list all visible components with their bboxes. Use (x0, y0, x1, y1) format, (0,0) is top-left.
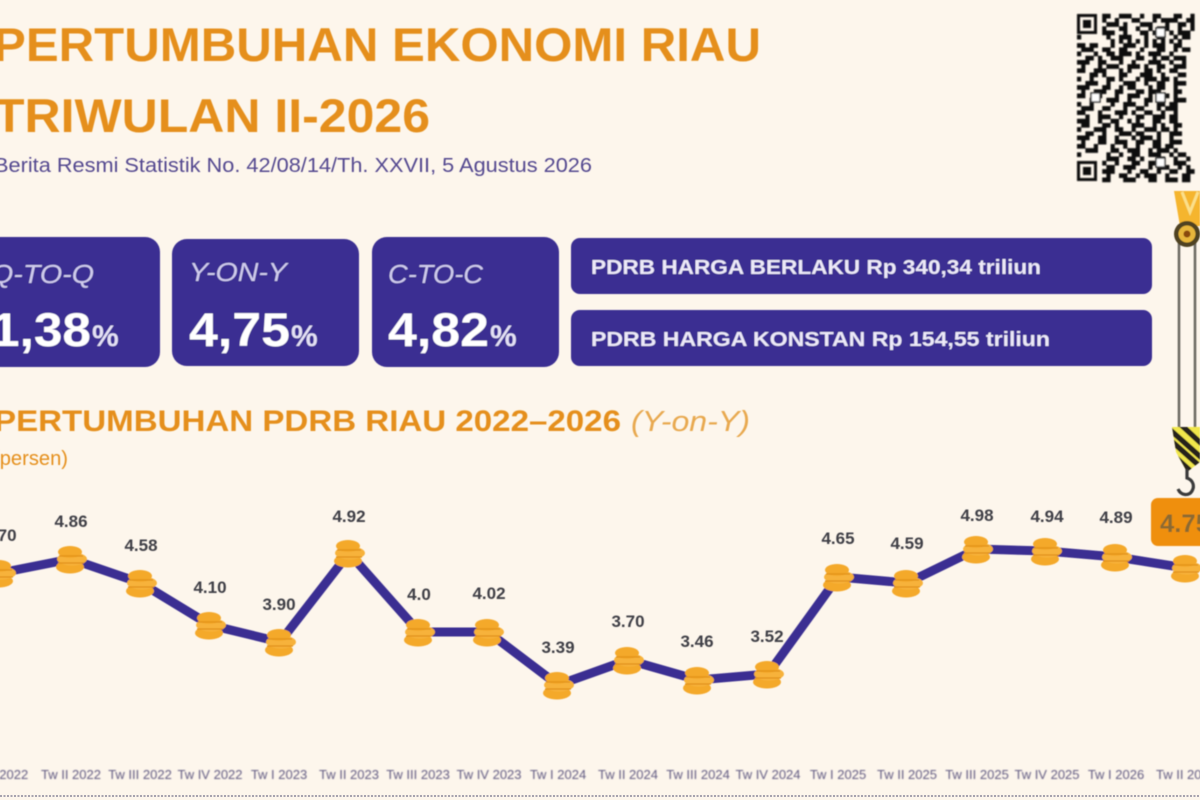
card: Y-on-Y: Y-ON-Y (189, 257, 289, 287)
bar: PDRB harga berlaku: PDRB HARGA BERLAKU Rp 340,34 triliun (591, 257, 1041, 279)
quarter axis labels: Tw I 2023 (251, 767, 307, 782)
data labels: 4.86 (54, 512, 88, 531)
data labels: 3.46 (680, 632, 714, 651)
card: C-to-C: C-TO-C (388, 259, 483, 289)
quarter axis labels: Tw IV 2023 (456, 767, 522, 782)
chart heading (0, 405, 750, 470)
data labels: 4.92 (332, 507, 366, 526)
quarter axis labels: Tw II 2023 (319, 767, 379, 782)
crane hook (1151, 191, 1200, 546)
data labels: 3.70 (611, 612, 645, 631)
data labels: 4.59 (890, 534, 924, 553)
crane top bracket (1174, 191, 1200, 226)
bar: PDRB harga konstan (571, 310, 1152, 366)
crane hook block (1171, 426, 1200, 472)
quarter axis labels: Tw IV 2022 (177, 767, 243, 782)
bar: PDRB harga berlaku (571, 238, 1152, 294)
card: C-to-C (372, 237, 559, 367)
QR finder patterns (1078, 16, 1096, 180)
QR alignment patterns (1091, 28, 1165, 167)
crane ropes (1179, 234, 1195, 427)
data labels: 3.39 (541, 638, 575, 657)
crane pulley (1174, 221, 1200, 247)
quarter axis labels: Tw II 2022 (41, 767, 101, 782)
quarter axis labels: Tw IV 2024 (735, 767, 801, 782)
chart heading: (Y-on-Y) (631, 406, 750, 438)
data labels: 4.58 (124, 536, 158, 555)
trend line (0, 549, 1186, 685)
title: PERTUMBUHAN EKONOMI RIAU (0, 18, 761, 71)
card: C-to-C: % (490, 320, 517, 353)
data labels: 4.02 (472, 584, 506, 603)
data labels: 4.10 (193, 578, 227, 597)
hook (1178, 469, 1193, 495)
quarter axis labels: Tw III 2025 (945, 767, 1009, 782)
card: C-to-C: 4,82 (388, 303, 489, 356)
card: Q-to-Q (0, 237, 160, 367)
QR code (1077, 16, 1195, 180)
quarter axis labels: Tw III 2024 (666, 767, 730, 782)
data labels: 4.65 (821, 529, 855, 548)
card: Y-on-Y (172, 239, 359, 366)
KPI cards (0, 237, 1152, 367)
quarter axis labels (0, 767, 1200, 782)
quarter axis labels: Tw III 2023 (386, 767, 450, 782)
header text (0, 18, 761, 177)
card: Y-on-Y: % (291, 320, 318, 353)
chart heading: PERTUMBUHAN PDRB RIAU 2022–2026 (0, 405, 621, 438)
data labels: 4.94 (1030, 507, 1064, 526)
title (0, 18, 761, 142)
quarter axis labels: Tw IV 2025 (1014, 767, 1080, 782)
data labels: 4.89 (1099, 508, 1133, 527)
data labels: 4.98 (960, 506, 994, 525)
quarter axis labels: Tw III 2022 (108, 767, 172, 782)
current value tag (1151, 498, 1200, 546)
subtitle: Berita Resmi Statistik No. 42/08/14/Th. XXVII, 5 Agustus 2026 (0, 155, 592, 177)
coin markers (0, 536, 1200, 700)
quarter axis labels: Tw I 2025 (810, 767, 866, 782)
data labels: 3.90 (262, 595, 296, 614)
data labels: 3.52 (750, 627, 784, 646)
quarter axis labels: Tw II 2024 (598, 767, 658, 782)
title: TRIWULAN II-2026 (0, 89, 430, 142)
quarter axis labels: Tw I 2026 (1088, 767, 1144, 782)
data labels: 4.0 (407, 585, 431, 604)
data labels (0, 506, 1133, 657)
quarter axis labels: Tw II 2025 (877, 767, 937, 782)
bar: PDRB harga konstan: PDRB HARGA KONSTAN Rp 154,55 triliun (591, 329, 1050, 351)
quarter axis labels: Tw I 2024 (530, 767, 586, 782)
card: Y-on-Y: 4,75 (189, 303, 290, 356)
line chart (0, 506, 1200, 700)
QR modules (1077, 16, 1195, 180)
card: Q-to-Q: % (92, 320, 119, 353)
